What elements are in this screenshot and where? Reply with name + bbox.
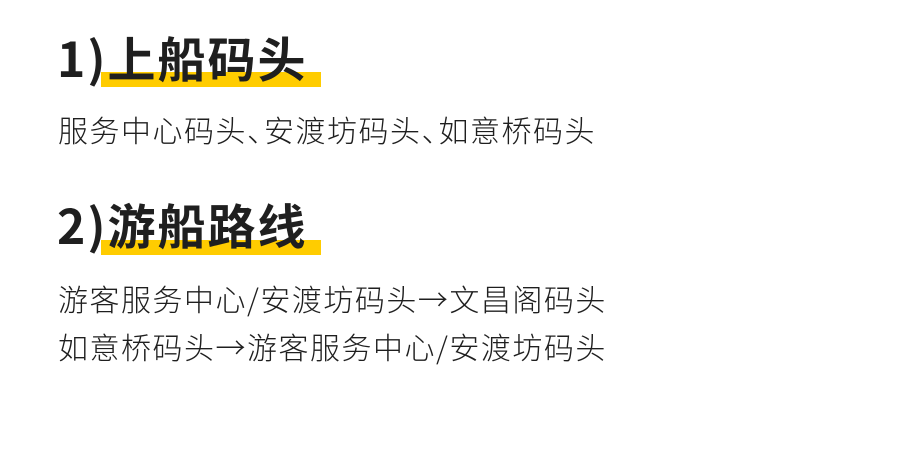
heading: 2) cruise routes: 2)游船路线 (57, 188, 307, 258)
heading: 1) boarding docks: 1)上船码头 (57, 21, 307, 91)
text: boarding dock list: 、 (247, 107, 277, 151)
text: boarding dock list: 服务中心码头 安渡坊码头 如意桥码头 (58, 107, 596, 151)
text: boarding dock list: 、 (422, 107, 452, 151)
text: route one: 游客服务中心/安渡坊码头→文昌阁码头 (58, 276, 607, 320)
text: route two: 如意桥码头→游客服务中心/安渡坊码头 (58, 324, 607, 368)
